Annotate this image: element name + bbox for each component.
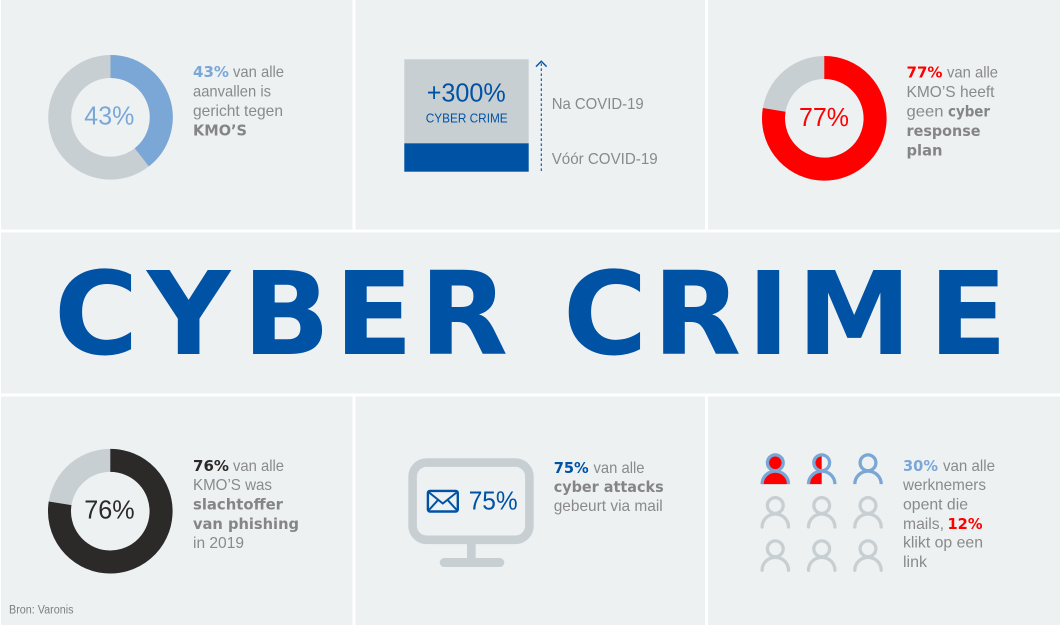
text: +300%: +300%: [427, 78, 506, 108]
text: 30% open mails, 12% click: link: [903, 554, 928, 571]
donut chart 43%: 43%: [84, 100, 134, 130]
bar: before covid: [404, 143, 529, 172]
text: 75% via mail: van alle: [594, 460, 645, 477]
panel: 76% phishing: [1, 396, 352, 625]
bar: after covid: [404, 59, 529, 143]
text: 43% of attacks: gericht tegen: [193, 103, 283, 120]
source note: Bron: Varonis: [9, 604, 74, 616]
text: 43% of attacks: aanvallen is: [193, 84, 271, 100]
text: 76% phishing: in 2019: [193, 535, 244, 552]
text: 76% phishing: van phishing: [193, 515, 299, 533]
text: 76% phishing: 76%: [193, 457, 229, 475]
icon: monitor: [413, 463, 529, 567]
text: 77% no plan: 77%: [906, 64, 942, 82]
person: clicked, red fill: [762, 455, 788, 484]
text: 30% open mails, 12% click: opent die: [903, 496, 968, 514]
label: voor covid: Vóór COVID-19: [552, 151, 658, 168]
donut chart 77%: 77%: [799, 102, 849, 132]
text: 43% of attacks: van alle: [233, 64, 284, 81]
text: 77% no plan: KMO’S heeft: [906, 84, 995, 101]
text: 43% of attacks: 43%: [193, 63, 229, 81]
text: 75% in monitor: 75%: [469, 486, 518, 516]
text: 75% via mail: cyber attacks: [554, 478, 664, 496]
icon: people grid: [762, 455, 881, 570]
text: 30% open mails, 12% click: 30%: [903, 457, 938, 475]
title: CYBER CRIME: [54, 248, 1007, 382]
panel: 43% KMO attacks: [1, 0, 352, 230]
person: half red: [808, 455, 835, 484]
icon: envelope: [428, 491, 458, 512]
text: 76% phishing: KMO’S was: [193, 477, 272, 494]
donut chart 76%: 76%: [84, 495, 135, 525]
panel: title band: [1, 232, 1060, 394]
text: 77% no plan: van alle: [947, 64, 998, 82]
text: 77% no plan: response: [906, 122, 980, 140]
text: 30% open mails, 12% click: van alle: [943, 458, 995, 475]
arrow: dotted upward: [536, 61, 547, 171]
text: 30% open mails, 12% click: mails,: [903, 516, 944, 533]
donut chart 76%: [59, 460, 161, 562]
text: 43% of attacks: KMO’S: [193, 122, 247, 140]
panel: 30% employees: [708, 396, 1060, 625]
text: 30% open mails, 12% click: werknemers: [902, 477, 986, 494]
text: 76% phishing: slachtoffer: [193, 496, 284, 514]
text: 76% phishing: van alle: [233, 458, 284, 475]
donut chart 43%: [60, 66, 161, 168]
text: 30% open mails, 12% click: 12%: [948, 515, 982, 533]
panel: +300% cyber crime: [356, 0, 705, 230]
donut chart 77%: [774, 68, 875, 169]
panel: 77% no response plan: [708, 0, 1060, 230]
text: cyber crime: CYBER CRIME: [426, 111, 508, 126]
label: na covid: Na COVID-19: [552, 96, 644, 113]
text: 75% via mail: gebeurt via mail: [554, 498, 663, 515]
person: blue outline: [855, 455, 881, 484]
text: 77% no plan: plan: [906, 142, 942, 160]
text: 77% no plan: geen: [906, 104, 944, 120]
text: 75% via mail: 75%: [554, 459, 589, 477]
text: 77% no plan: cyber: [948, 102, 991, 120]
persons: gray outlines: [762, 498, 881, 570]
panel: 75% via mail: [356, 396, 705, 625]
text: 30% open mails, 12% click: klikt op een: [903, 534, 983, 552]
